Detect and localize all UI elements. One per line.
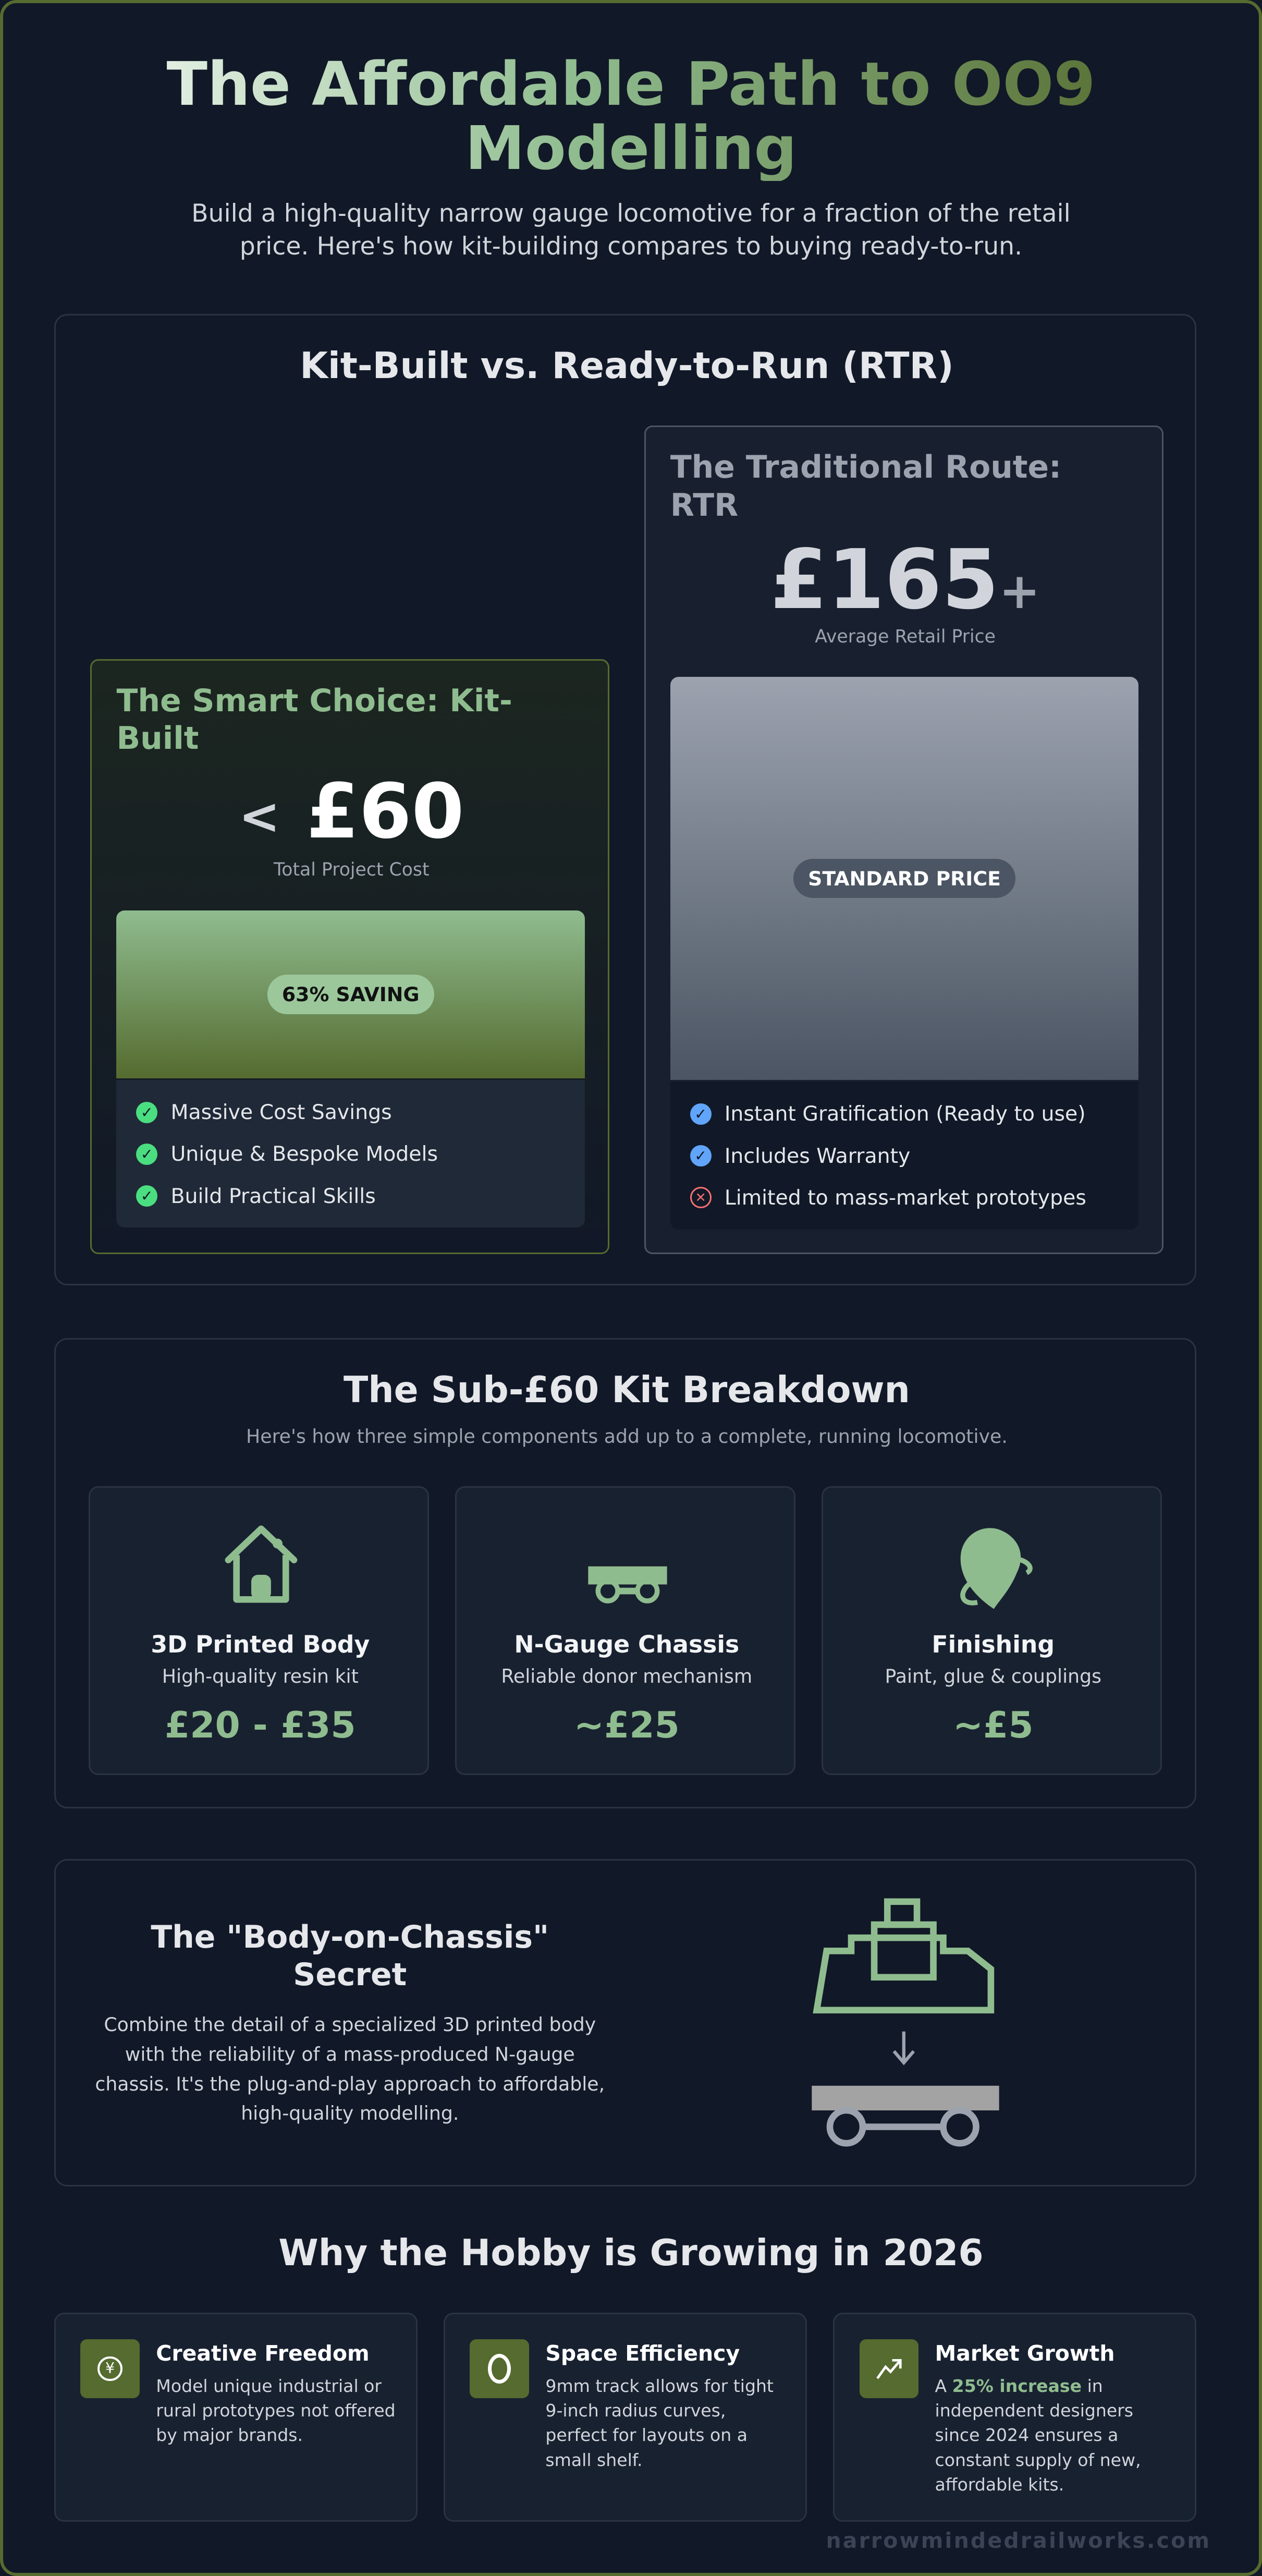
list: kit benefits: Unique & Bespoke Models [170,1142,438,1166]
list: kit benefits: ✓ [141,1187,153,1205]
badge: standard: STANDARD PRICE [808,867,1001,890]
card: finishing [822,1486,1162,1775]
heading: secret: The "Body-on-Chassis" Secret [151,1919,549,1993]
list: kit benefits: ✓ [141,1146,153,1163]
list: rtr features: ✓ [694,1105,707,1123]
list: kit benefits: ✓ [141,1104,153,1121]
list: rtr features: ✕ [695,1190,706,1205]
chassis price: ~£25 [574,1705,680,1746]
card: body [89,1486,429,1775]
space text: 9mm track allows for tight 9-inch radius curves, perfect for layouts on a small shelf. [545,2376,774,2470]
panel: comparison [54,314,1196,1285]
breakdown subtitle: Here's how three simple components add up to a complete, running locomotive. [246,1425,1008,1448]
body price: £20 - £35 [165,1705,356,1746]
icon: trend [860,2339,918,2398]
icon: yen: ¥ [105,2360,115,2377]
list: rtr features: ✓ [694,1147,707,1164]
heading: comparison: Kit-Built vs. Ready-to-Run (RTR) [300,345,954,387]
creative text: Model unique industrial or rural prototypes not offered by major brands. [156,2376,396,2445]
badge: saving [267,975,434,1014]
badge: saving: 63% SAVING [282,983,419,1006]
kit price label: Total Project Cost [274,859,430,880]
rtr price: £165+ [770,532,1040,628]
list: kit benefits: Build Practical Skills [170,1184,376,1208]
space title: Space Efficiency [545,2341,740,2366]
panel: body on chassis [54,1859,1196,2186]
market text: A 25% increase in independent designers since 2024 ensures a constant supply of new, affordable kits. [935,2376,1141,2495]
list: rtr features: Instant Gratification (Ready to use) [725,1102,1086,1126]
heading: breakdown: The Sub-£60 Kit Breakdown [344,1369,910,1411]
footer: narrowmindedrailworks.com [826,2528,1211,2553]
market title: Market Growth [935,2341,1114,2366]
chassis sub: Reliable donor mechanism [501,1665,752,1687]
card: chassis [455,1486,795,1775]
body sub: High-quality resin kit [162,1665,359,1687]
list: kit benefits [116,1080,585,1228]
heading: growth: Why the Hobby is Growing in 2026 [278,2232,984,2274]
bar: kit [116,910,585,1078]
card: RTR [644,426,1163,1254]
bar: rtr [670,677,1138,1080]
card: kit-built [90,659,609,1254]
subtitle: Build a high-quality narrow gauge locomotive for a fraction of the retail price. Here's how kit-building compares to buying ready-to-run. [191,199,1071,261]
card: market growth [833,2313,1196,2522]
icon: chassis [588,1566,667,1603]
list: rtr features: Includes Warranty [725,1144,910,1168]
card: creative freedom [54,2313,418,2522]
kit title: The Smart Choice: Kit-Built [116,683,512,757]
finishing title: Finishing [932,1631,1055,1658]
rtr price label: Average Retail Price [815,626,996,647]
list: rtr features: Limited to mass-market prototypes [725,1186,1086,1210]
body title: 3D Printed Body [151,1631,370,1658]
list: rtr features [670,1082,1138,1230]
icon: gear [470,2339,529,2398]
list: kit benefits: Massive Cost Savings [170,1100,392,1124]
kit price: < £60 [239,768,464,856]
creative title: Creative Freedom [156,2341,370,2366]
icon: yen [80,2339,140,2398]
icon: paint [960,1528,1033,1609]
illustration: body to chassis [812,1898,999,2146]
rtr title: The Traditional Route: RTR [670,449,1061,524]
title: The Affordable Path to OO9 Modelling [167,50,1095,184]
finishing sub: Paint, glue & couplings [885,1665,1101,1687]
panel: breakdown [54,1338,1196,1808]
finishing price: ~£5 [953,1705,1034,1746]
badge: standard [793,859,1015,898]
chassis title: N-Gauge Chassis [514,1631,739,1658]
text: secret: Combine the detail of a specialized 3D printed body with the reliability of a mass-produced N-gauge chassis. It's the plug-and-play approach to affordable, high-quality modelling. [95,2013,605,2124]
card: space efficiency [444,2313,807,2522]
icon: house [225,1526,297,1603]
